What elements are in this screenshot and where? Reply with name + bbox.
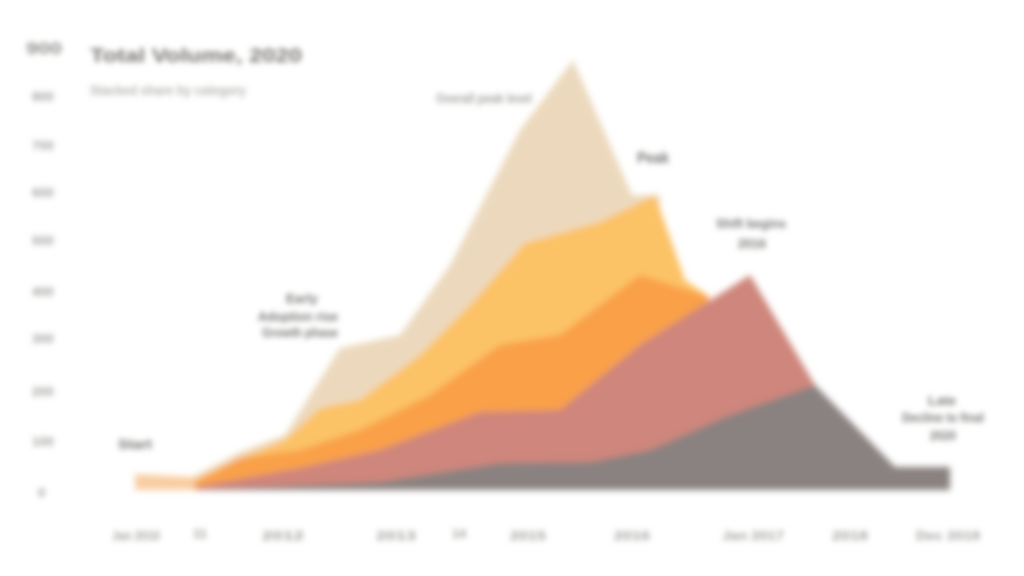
annotation: end: Late	[928, 393, 956, 408]
y axis labels: 100	[32, 434, 54, 449]
area: pale start stub	[135, 474, 196, 490]
x axis labels: 2015	[510, 528, 546, 543]
annotation: peak: Overall peak level	[436, 90, 532, 106]
x axis labels: Dec 2019	[916, 528, 980, 543]
y axis labels: 900	[26, 39, 62, 58]
x axis labels	[112, 526, 980, 543]
area: rose series	[190, 275, 815, 490]
annotation: end: 2020	[930, 428, 956, 443]
x axis labels: 14	[452, 526, 467, 541]
title block	[90, 46, 302, 98]
annotation: first rise	[258, 291, 338, 340]
annotation: first rise: Early	[286, 291, 319, 306]
y axis labels: 400	[32, 284, 54, 299]
stacked area chart	[135, 60, 950, 490]
x axis labels: 2012	[262, 528, 304, 543]
annotation: first rise: Adoption rise	[258, 309, 338, 324]
area: orange series	[190, 275, 710, 490]
annotation: end	[902, 393, 984, 443]
y axis labels: 0	[38, 485, 45, 500]
x axis labels: 2013	[376, 528, 416, 543]
annotation: start: Start	[118, 436, 152, 452]
y axis labels: 300	[32, 331, 54, 346]
x axis labels: 2018	[832, 528, 868, 543]
annotation: first rise: Growth phase	[262, 325, 338, 340]
y axis labels: 700	[32, 138, 54, 153]
x axis labels: 11	[193, 526, 207, 541]
annotation: second peak: Peak	[637, 150, 669, 167]
area: dark taupe series	[190, 385, 950, 490]
area: beige series	[190, 60, 660, 490]
x axis labels: Jan 2010	[112, 528, 160, 543]
y axis labels: 800	[32, 89, 54, 104]
baseline	[60, 490, 1005, 492]
annotation: rose peak: Shift begins	[716, 216, 786, 231]
annotation: end: Decline to final	[902, 410, 984, 425]
y axis labels	[26, 39, 62, 500]
annotation: rose peak: 2016	[738, 236, 766, 251]
y axis labels: 500	[32, 233, 54, 248]
subheading: Stacked share by category	[90, 82, 246, 98]
annotation: rose peak	[716, 216, 786, 251]
x axis labels: 2016	[614, 528, 650, 543]
y axis labels: 200	[32, 384, 54, 399]
area: light orange series	[190, 195, 710, 490]
annotations	[118, 90, 984, 452]
x axis labels: Jan 2017	[722, 528, 784, 543]
heading: Total Volume, 2020	[90, 46, 302, 67]
y axis labels: 600	[32, 185, 54, 200]
